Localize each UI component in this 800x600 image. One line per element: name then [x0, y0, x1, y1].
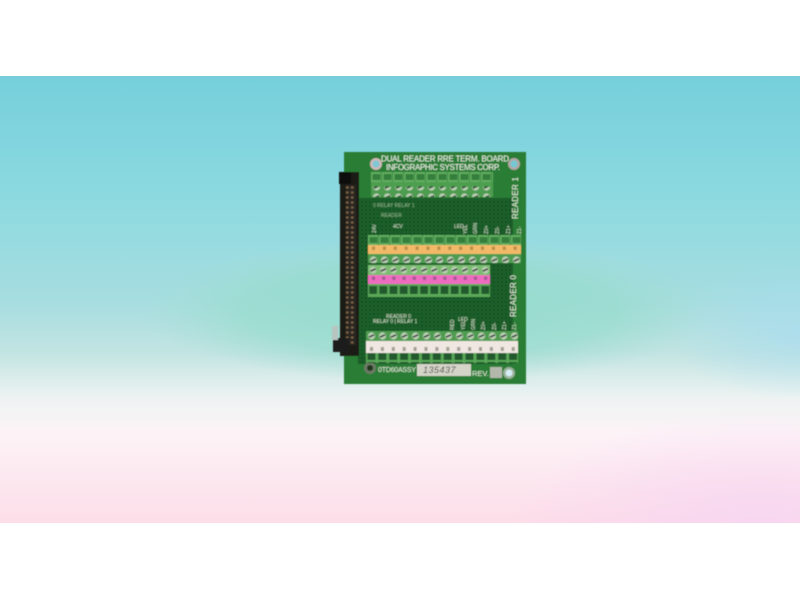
photo background	[0, 76, 800, 523]
assembly number label: 135437	[423, 365, 457, 375]
board title: DUAL READER RRE TERM. BOARD	[381, 154, 509, 164]
silkscreen labels lower: Z0+	[481, 321, 487, 330]
silkscreen labels upper: Z1+	[506, 225, 512, 234]
silkscreen labels upper: 4CV	[393, 224, 403, 230]
assembly number label: 0TD60ASSY	[378, 367, 416, 374]
silkscreen labels upper: READER	[381, 213, 402, 219]
silkscreen labels lower: Z1+	[502, 321, 508, 330]
side labels: READER 0	[509, 274, 518, 317]
side labels: READER 1	[511, 176, 520, 219]
mounting holes	[364, 158, 520, 379]
terminal block: white	[366, 331, 518, 363]
board title	[381, 154, 509, 172]
silkscreen labels lower: RELAY 0 | RELAY 1	[373, 319, 418, 325]
silkscreen labels upper: Z0-	[495, 226, 501, 234]
assembly number label	[378, 364, 502, 378]
silkscreen labels upper: GRN	[473, 222, 479, 234]
ribbon connector	[332, 172, 359, 356]
silkscreen labels upper: Z1-	[517, 226, 523, 234]
silkscreen labels lower: YEL	[461, 320, 467, 330]
silkscreen labels lower: RED	[450, 319, 456, 330]
side labels	[509, 176, 520, 317]
silkscreen labels lower: LED	[458, 317, 468, 323]
silkscreen labels lower: GRN	[471, 318, 477, 330]
board base	[344, 152, 526, 384]
silkscreen labels lower: Z1-	[512, 322, 518, 330]
silkscreen labels upper: 0 RELAY RELAY 1	[373, 203, 415, 209]
silkscreen labels upper: LED	[454, 224, 464, 230]
silkscreen labels lower: Z0-	[492, 322, 498, 330]
assembly number label: REV.	[472, 369, 489, 378]
terminal block: reader 1 top	[371, 172, 493, 197]
terminal block: pink	[368, 265, 490, 297]
board title: INFOGRAPHIC SYSTEMS CORP.	[386, 163, 500, 172]
terminal block: orange	[368, 235, 521, 263]
silkscreen labels upper	[372, 203, 523, 234]
silkscreen labels upper: 24V	[372, 223, 378, 233]
silkscreen labels lower: READER 0	[386, 314, 411, 320]
silkscreen labels lower	[373, 314, 518, 330]
circuit board assembly	[332, 152, 526, 384]
silkscreen labels upper: Z0+	[484, 225, 490, 234]
silkscreen labels upper: YEL	[463, 224, 469, 234]
